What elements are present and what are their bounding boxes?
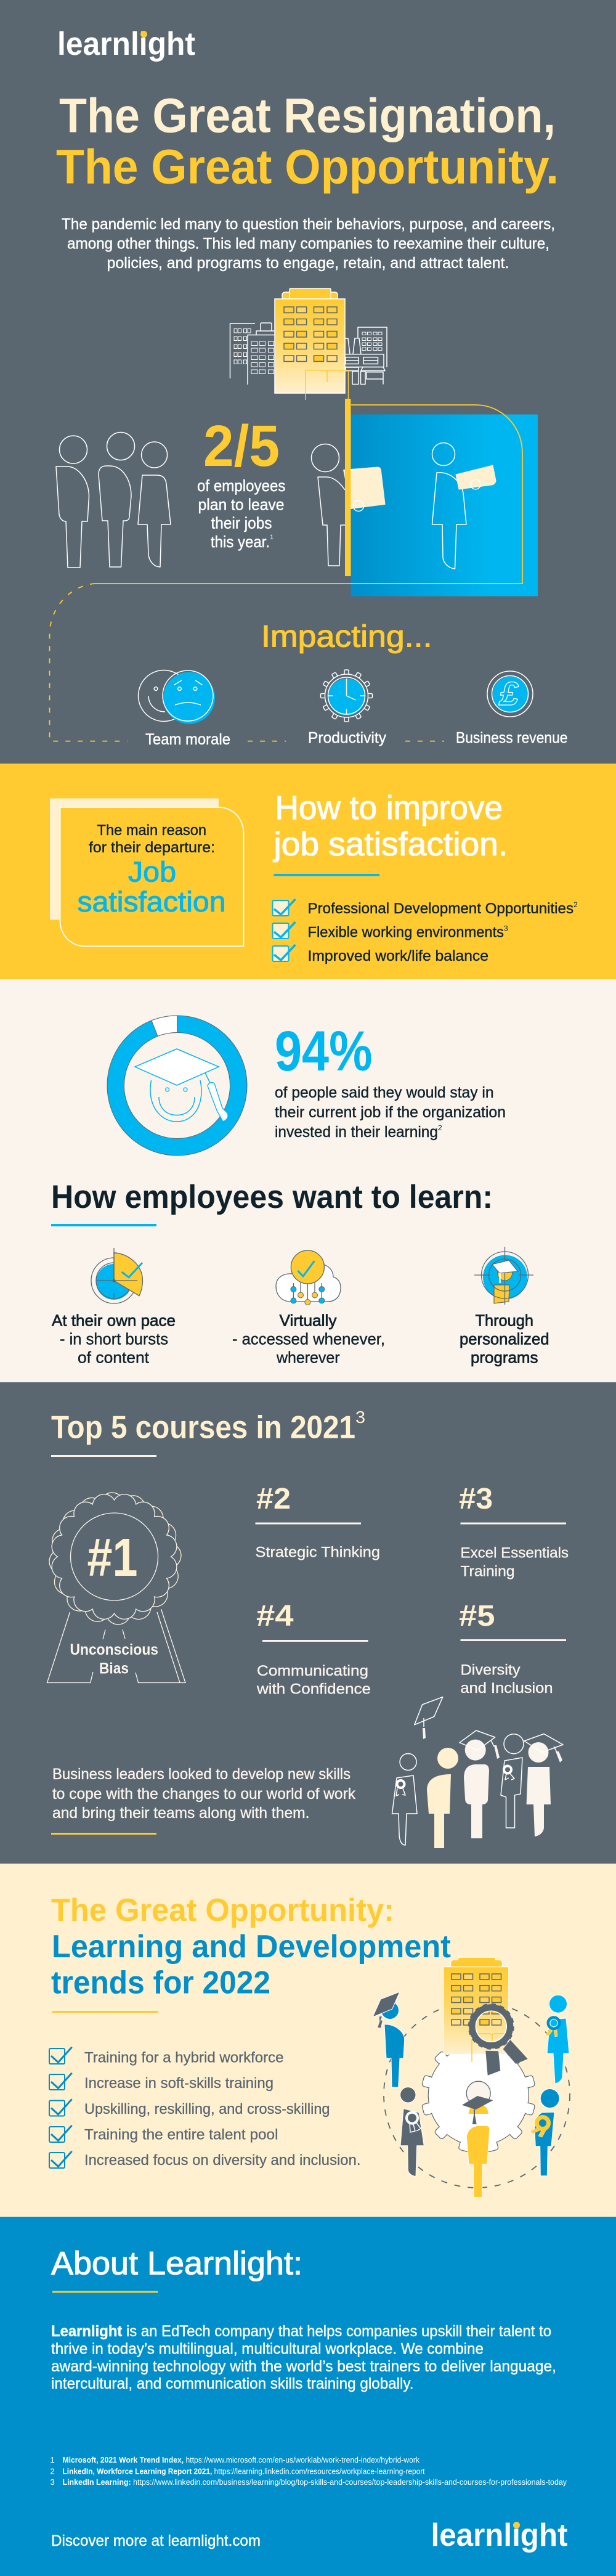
checklist: job satisfaction: Professional Development Opportunities: [308, 900, 573, 917]
heading: about: About Learnlight:: [51, 2246, 302, 2281]
heading: how employees want to learn: How employees want to learn:: [51, 1179, 493, 1215]
panel: top courses: [0, 1382, 616, 1864]
footnotes: Microsoft, 2021 Work Trend Index, https://www.microsoft.com/en-us/worklab/work-trend-index/hybrid-work: [63, 2455, 419, 2464]
text: own pace: of content: [78, 1348, 150, 1367]
panel: the great opportunity: [0, 1864, 616, 2217]
icon: team morale faces: [138, 670, 215, 723]
checklist: trends: Training the entire talent pool: [84, 2126, 278, 2143]
labels: impacts: Productivity: [308, 730, 386, 747]
text: about paragraph: intercultural, and communication skills training globally.: [51, 2375, 414, 2392]
text: of employees plan to leave: this year.: [211, 532, 270, 551]
labels: impacts: Team morale: [145, 731, 230, 748]
illustration: graduates group: [392, 1697, 563, 1848]
text: about paragraph: thrive in today’s multilingual, multicultural workplace. We combine: [51, 2341, 484, 2358]
icon: dark rosette with ribbons: [470, 2005, 528, 2076]
door bar and boxes: [343, 399, 496, 576]
logo: learnlight footer: learnlight: [431, 2517, 568, 2553]
heading: top 5 courses: 3: [355, 1408, 365, 1427]
badge: number 1 Unconscious Bias: Unconscious: [70, 1641, 158, 1658]
text: about paragraph: award-winning technology with the world’s best trainers to deliver language,: [51, 2358, 556, 2375]
stat: 94 percent: 94%: [275, 1020, 372, 1083]
text: business leaders: and bring their teams along with them.: [52, 1804, 309, 1822]
course: number 4: #4: [256, 1600, 294, 1632]
icon: yellow tower: [444, 1957, 509, 2062]
panel: learning: [0, 979, 616, 1382]
heading: how to improve: How to improve: [275, 789, 503, 826]
person: lower left grey: [400, 2087, 424, 2177]
text: business leaders: [52, 1766, 355, 1822]
checklist: trends: Increase in soft-skills training: [84, 2075, 274, 2092]
text: personalized: [460, 1311, 549, 1367]
checklist: job satisfaction: [272, 899, 578, 964]
text: personalized: programs: [471, 1348, 538, 1367]
panel: job satisfaction: [0, 764, 616, 979]
text: of employees plan to leave: their jobs: [211, 514, 272, 532]
course: number 5: Diversity: [461, 1661, 521, 1679]
text: virtually: Virtually: [280, 1311, 336, 1330]
icon: target with mortarboard: [474, 1247, 533, 1305]
course: number 5: #5: [459, 1600, 495, 1632]
badge: number 1 Unconscious Bias: #1: [87, 1528, 138, 1588]
text: virtually: - accessed whenever,: [232, 1330, 385, 1348]
callout: main reason: for their departure:: [89, 839, 215, 856]
person: top left graduate: [373, 1992, 405, 2087]
course: number 2: #2: [256, 1483, 291, 1515]
icon: productivity gear clock: [320, 670, 372, 722]
footnotes: [51, 2455, 567, 2487]
icon: city buildings: [230, 288, 387, 400]
course: number 2: [255, 1483, 380, 1560]
icon: business revenue pound: £: [498, 675, 519, 712]
footnotes: LinkedIn Learning: https://www.linkedin.com/business/learning/blog/top-skills-and-courses/top-leadership-skills-and-courses-for-professionals-today: [63, 2477, 567, 2487]
checklist: trends: Upskilling, reskilling, and cross-skilling: [84, 2101, 330, 2117]
course: number 4: [256, 1600, 371, 1697]
text: virtually: [232, 1311, 385, 1367]
intro paragraph: policies, and programs to engage, retain, and attract talent.: [107, 255, 509, 272]
title: The Great Resignation,: [59, 88, 556, 143]
heading: L and D trends: The Great Opportunity:: [51, 1893, 394, 1928]
stat: 2/5: 2/5: [203, 414, 280, 479]
heading: how to improve: [272, 789, 508, 863]
panel: hero: [0, 0, 616, 764]
icon: business revenue pound: [487, 671, 533, 717]
text: stay in job: [275, 1084, 506, 1141]
course: number 4: with Confidence: [256, 1681, 371, 1697]
text: virtually: wherever: [276, 1348, 340, 1367]
title: [56, 88, 559, 194]
icon: white gear: [422, 2039, 535, 2152]
course: number 3: Excel Essentials: [461, 1544, 569, 1562]
footnotes: 3: [51, 2477, 55, 2487]
badge: number 1 Unconscious Bias: [42, 1485, 188, 1682]
text: personalized: personalized: [460, 1330, 549, 1348]
heading: top 5 courses: Top 5 courses in 2021: [51, 1410, 355, 1446]
intro paragraph: among other things. This led many companies to reexamine their culture,: [67, 235, 549, 253]
intro paragraph: [62, 216, 555, 272]
chart: 94 percent donut with graduate face: [107, 1016, 247, 1156]
person: top right bright blue: [546, 1995, 569, 2084]
icon: cloud with check: [276, 1250, 341, 1305]
course: number 2: Strategic Thinking: [255, 1544, 380, 1560]
text: of employees plan to leave: [197, 476, 286, 551]
logo: learnlight: learnlight: [57, 26, 195, 62]
heading: L and D trends: [51, 1893, 451, 2000]
illustration: organisation circle: [373, 1957, 570, 2198]
checklist: job satisfaction: Improved work/life balance: [308, 948, 488, 964]
badge: number 1 Unconscious Bias: Bias: [99, 1660, 129, 1677]
heading: L and D trends: Learning and Development: [52, 1929, 451, 1965]
callout: main reason: satisfaction: [78, 886, 225, 918]
panel: about learnlight: [0, 2217, 616, 2576]
callout: main reason: [50, 799, 243, 946]
text: business leaders: Business leaders looked to develop new skills: [52, 1766, 351, 1783]
person: centre yellow graduate: [462, 2081, 493, 2198]
text: stay in job: their current job if the organization: [275, 1104, 506, 1121]
text: personalized: Through: [476, 1311, 533, 1330]
labels: impacts: Business revenue: [456, 730, 568, 747]
checklist: trends: [49, 2047, 361, 2169]
course: number 5: [459, 1600, 566, 1697]
icon: clock with check: [91, 1248, 143, 1303]
heading: how to improve: job satisfaction.: [272, 826, 508, 863]
text: of employees plan to leave: plan to leave: [198, 495, 285, 514]
text: stay in job: 2: [438, 1123, 442, 1132]
callout: main reason: Job: [128, 855, 176, 887]
footnotes: 2: [51, 2466, 55, 2476]
title: The Great Opportunity.: [56, 139, 559, 194]
text: own pace: [52, 1311, 176, 1367]
intro paragraph: The pandemic led many to question their behaviors, purpose, and careers,: [62, 216, 555, 233]
labels: impacts: [145, 730, 568, 748]
icon: main yellow tower: [275, 288, 349, 400]
callout: main reason: The main reason: [97, 822, 206, 839]
checklist: job satisfaction: 2: [573, 900, 578, 909]
person: lower right blue: [530, 2089, 559, 2176]
text: business leaders: to cope with the changes to our world of work: [52, 1785, 355, 1803]
checklist: trends: Training for a hybrid workforce: [84, 2050, 283, 2066]
course: number 3: [459, 1483, 569, 1580]
footnotes: 1: [51, 2455, 55, 2464]
footnotes: LinkedIn, Workforce Learning Report 2021, https://learning.linkedin.com/resources/workplace-learning-report: [63, 2466, 425, 2476]
heading: L and D trends: trends for 2022: [51, 1965, 270, 2000]
text: about paragraph: [51, 2323, 556, 2392]
text: of employees plan to leave: of employees: [197, 476, 286, 495]
heading: Impacting: Impacting...: [261, 619, 432, 653]
outline frame with blue panel: [49, 405, 538, 741]
course: number 3: Training: [461, 1563, 515, 1580]
course: number 5: and Inclusion: [461, 1680, 553, 1697]
text: about paragraph: Learnlight is an EdTech company that helps companies upskill their talent to: [51, 2323, 551, 2340]
text: own pace: At their own pace: [52, 1311, 176, 1330]
checklist: trends: Increased focus on diversity and inclusion.: [84, 2152, 361, 2169]
text: of employees plan to leave: 1: [270, 534, 274, 541]
course: number 4: Communicating: [257, 1663, 368, 1679]
text: stay in job: invested in their learning: [275, 1123, 438, 1141]
text: discover more: Discover more at learnlight.com: [51, 2532, 261, 2550]
text: own pace: - in short bursts: [60, 1330, 168, 1348]
text: stay in job: of people said they would stay in: [275, 1084, 494, 1101]
checklist: job satisfaction: 3: [504, 924, 508, 933]
people leaving illustration: [56, 433, 466, 569]
course: number 3: #3: [459, 1483, 493, 1515]
checklist: job satisfaction: Flexible working environments: [308, 924, 504, 940]
